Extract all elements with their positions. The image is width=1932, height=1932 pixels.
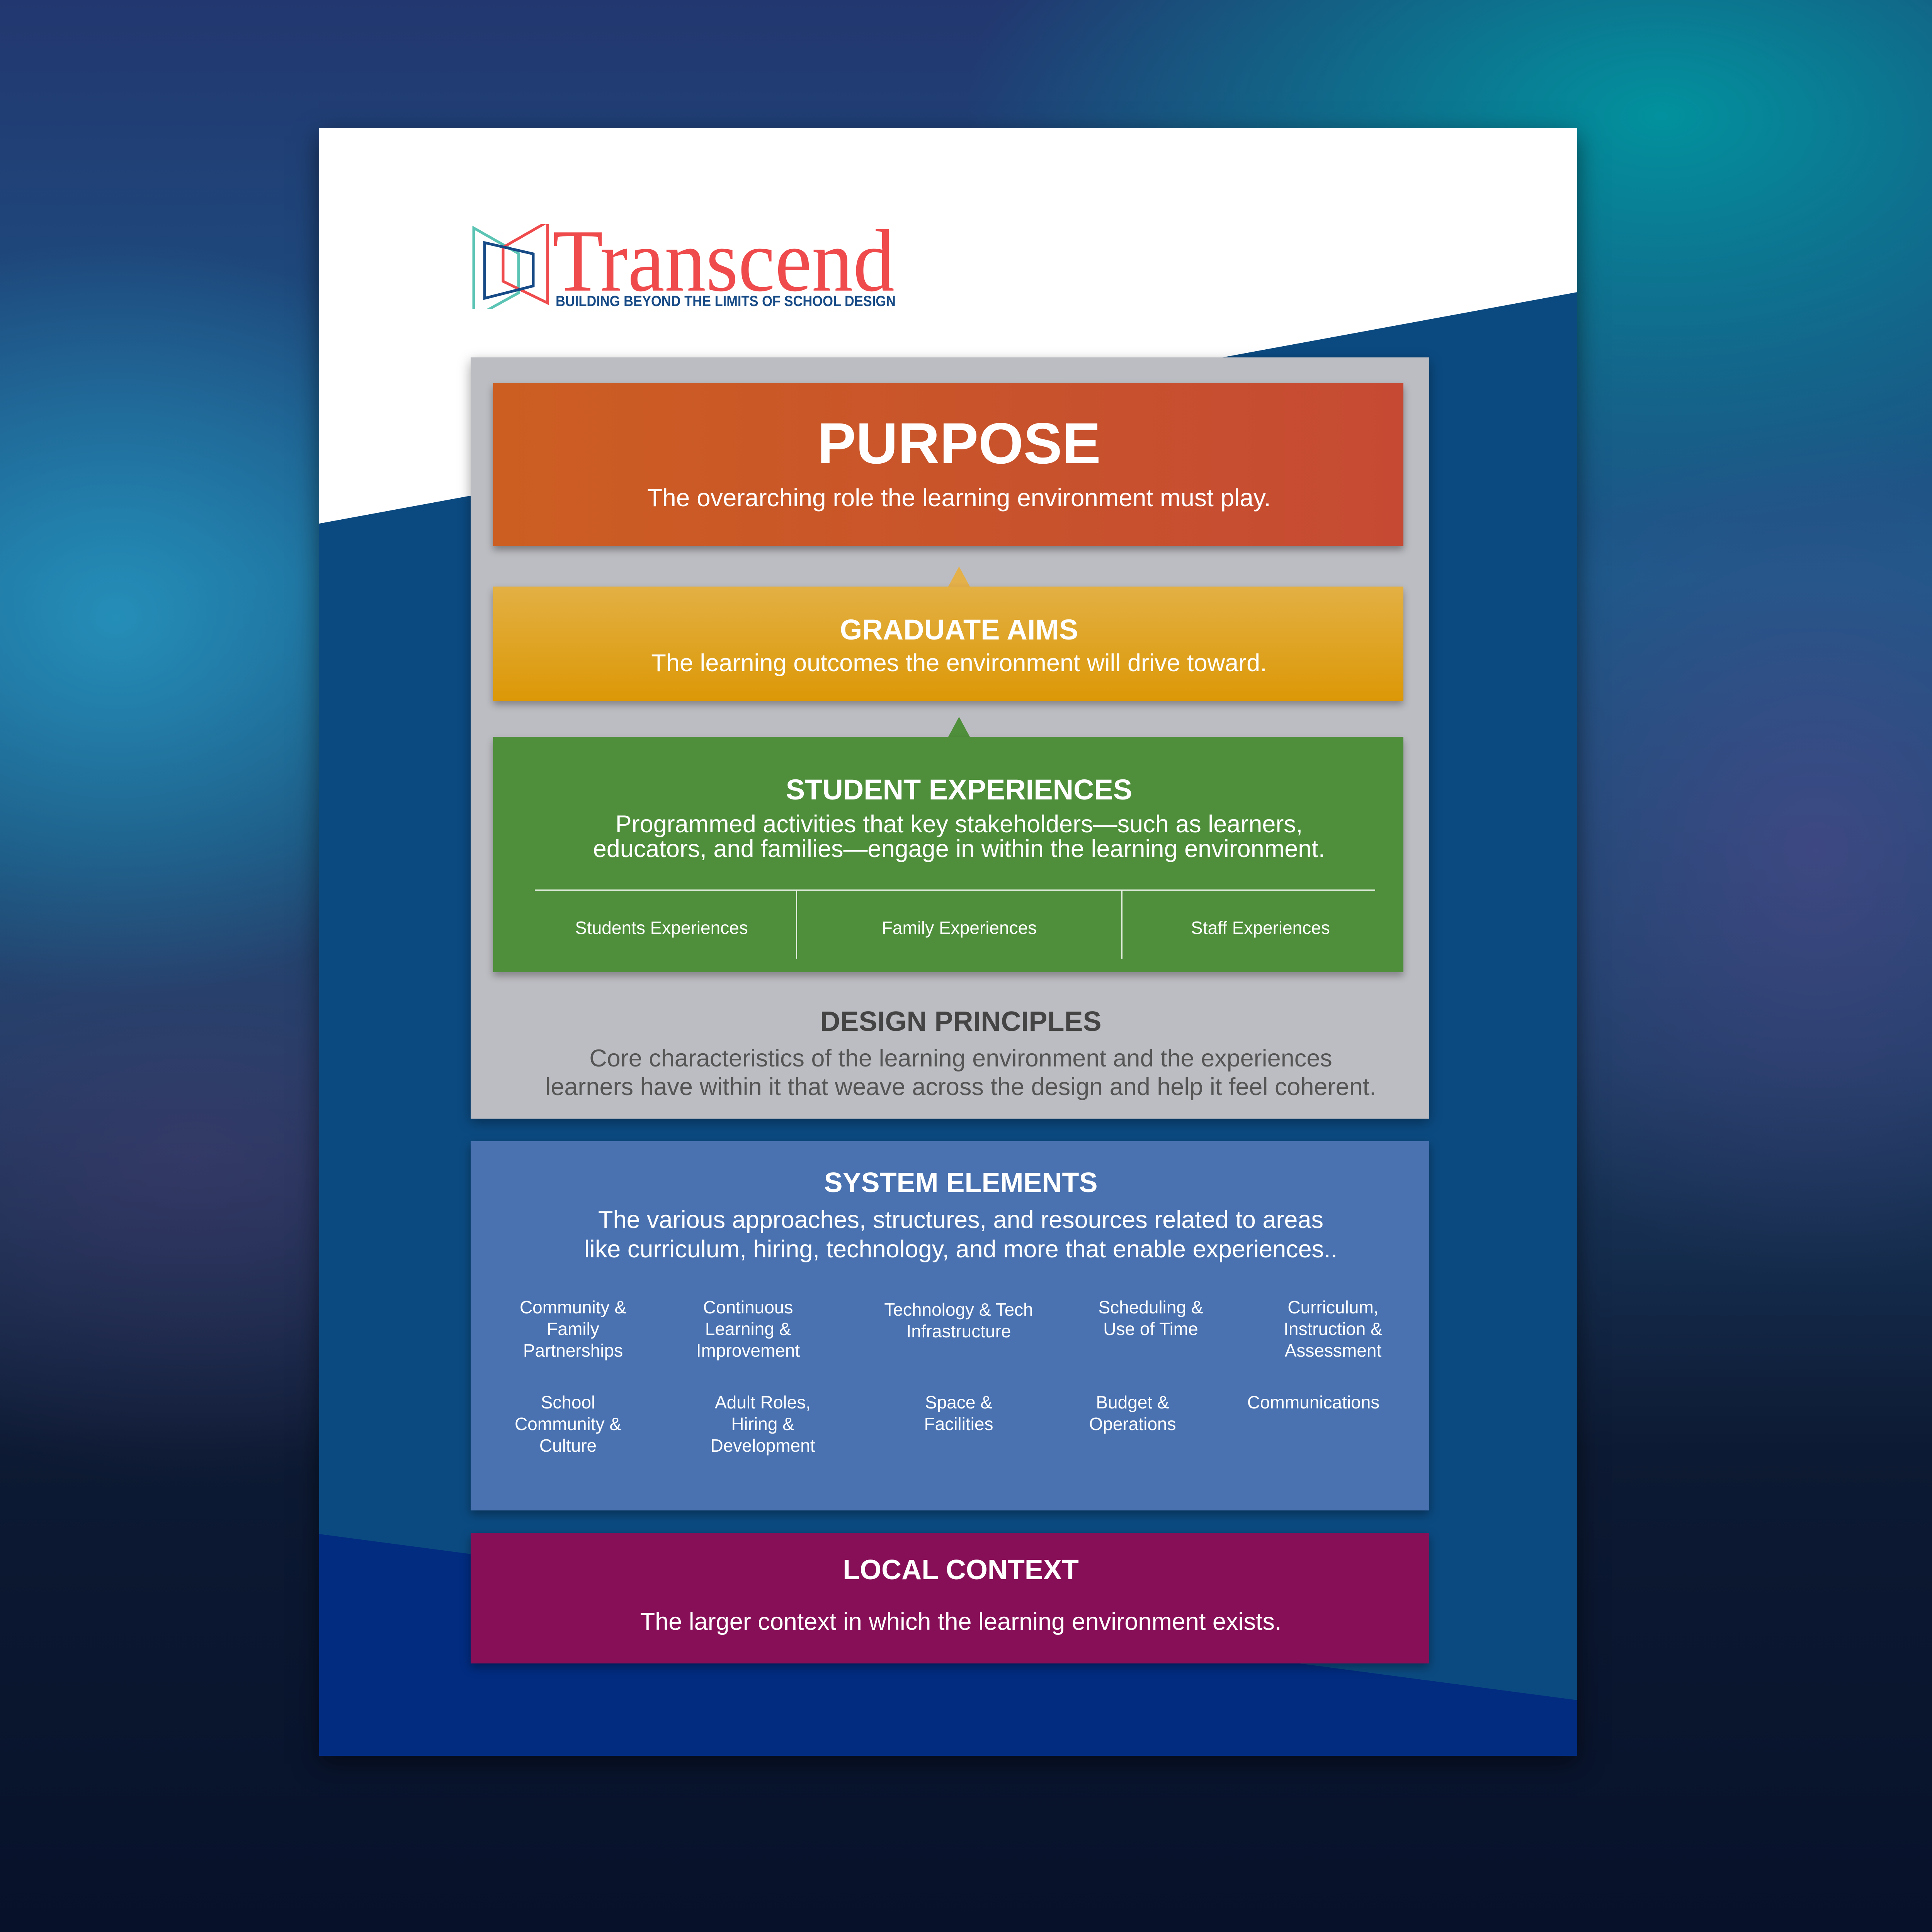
label: family experiences: Family Experiences	[882, 918, 1037, 938]
text: local context: The larger context in which the learning environment exists.	[640, 1608, 1281, 1635]
item: community & family partnerships	[465, 1296, 681, 1361]
sub-items: experiences	[535, 889, 1375, 957]
text: graduate aims: The learning outcomes the environment will drive toward.	[651, 650, 1267, 677]
text: system elements	[481, 1205, 1440, 1264]
item: curriculum: Instruction &	[1284, 1319, 1383, 1339]
text: student experiences	[504, 812, 1414, 861]
panel: graduate aims	[493, 587, 1403, 701]
text: student experiences: Programmed activities that key stakeholders—such as learners,	[616, 811, 1303, 838]
item: continuous learning	[640, 1296, 856, 1361]
item: community & family partnerships: Community &	[520, 1297, 626, 1317]
item: adult roles	[655, 1391, 871, 1456]
item: scheduling: Use of Time	[1103, 1319, 1198, 1339]
heading: graduate aims: GRADUATE AIMS	[840, 614, 1078, 646]
heading: design principles: DESIGN PRINCIPLES	[820, 1006, 1102, 1037]
text: purpose: The overarching role the learning environment must play.	[647, 484, 1271, 512]
item: space: Space &	[925, 1392, 992, 1412]
item: community & family partnerships: Partnerships	[523, 1340, 623, 1361]
item: curriculum: Assessment	[1285, 1340, 1381, 1361]
item: continuous learning: Improvement	[696, 1340, 800, 1361]
arrow: up to purpose	[948, 566, 970, 587]
panel: local context	[471, 1533, 1429, 1663]
heading: purpose: PURPOSE	[817, 411, 1101, 476]
arrow: up to graduate aims	[948, 717, 970, 737]
text: student experiences: educators, and families—engage in within the learning environment.	[593, 835, 1325, 862]
item: budget: Budget &	[1096, 1392, 1169, 1412]
panel: system elements	[471, 1141, 1429, 1510]
icon: logo mark	[474, 222, 548, 318]
item: technology: Technology & Tech	[884, 1299, 1033, 1320]
item: adult roles: Development	[710, 1435, 815, 1456]
item: space: Facilities	[924, 1414, 993, 1434]
text: design principles: learners have within it that weave across the design and help it feel coherent.	[545, 1073, 1376, 1100]
item: curriculum	[1225, 1296, 1441, 1361]
item: space	[850, 1391, 1067, 1435]
item: continuous learning: Learning &	[705, 1319, 791, 1339]
panel: student experiences	[493, 737, 1403, 972]
item: communications: Communications	[1247, 1392, 1379, 1412]
panel: gray framework	[471, 357, 1429, 1119]
item: budget	[1024, 1391, 1241, 1435]
item: school community: School	[541, 1392, 595, 1412]
item: technology	[850, 1299, 1067, 1342]
item: school community	[460, 1391, 676, 1456]
item: scheduling: Scheduling &	[1098, 1297, 1203, 1317]
item: continuous learning: Continuous	[703, 1297, 793, 1317]
item: technology: Infrastructure	[906, 1321, 1011, 1341]
panel: purpose	[493, 383, 1403, 546]
label: staff experiences: Staff Experiences	[1191, 918, 1330, 938]
page	[319, 128, 1577, 1756]
text: design principles: Core characteristics of the learning environment and the experiences	[589, 1045, 1332, 1072]
item: school community: Community &	[515, 1414, 621, 1434]
text: design principles	[481, 1044, 1440, 1101]
item: adult roles: Adult Roles,	[715, 1392, 811, 1412]
item: adult roles: Hiring &	[731, 1414, 794, 1434]
heading: local context: LOCAL CONTEXT	[843, 1554, 1079, 1585]
text: system elements: like curriculum, hiring, technology, and more that enable experiences..	[584, 1236, 1337, 1263]
label: students experiences: Students Experiences	[575, 918, 748, 938]
item: community & family partnerships: Family	[547, 1319, 599, 1339]
heading: system elements: SYSTEM ELEMENTS	[824, 1167, 1098, 1198]
item: budget: Operations	[1089, 1414, 1176, 1434]
heading: student experiences: STUDENT EXPERIENCES	[786, 774, 1132, 806]
item: curriculum: Curriculum,	[1287, 1297, 1379, 1317]
item: scheduling	[1043, 1296, 1259, 1340]
item: school community: Culture	[539, 1435, 597, 1456]
text: system elements: The various approaches, structures, and resources related to areas	[598, 1206, 1323, 1233]
